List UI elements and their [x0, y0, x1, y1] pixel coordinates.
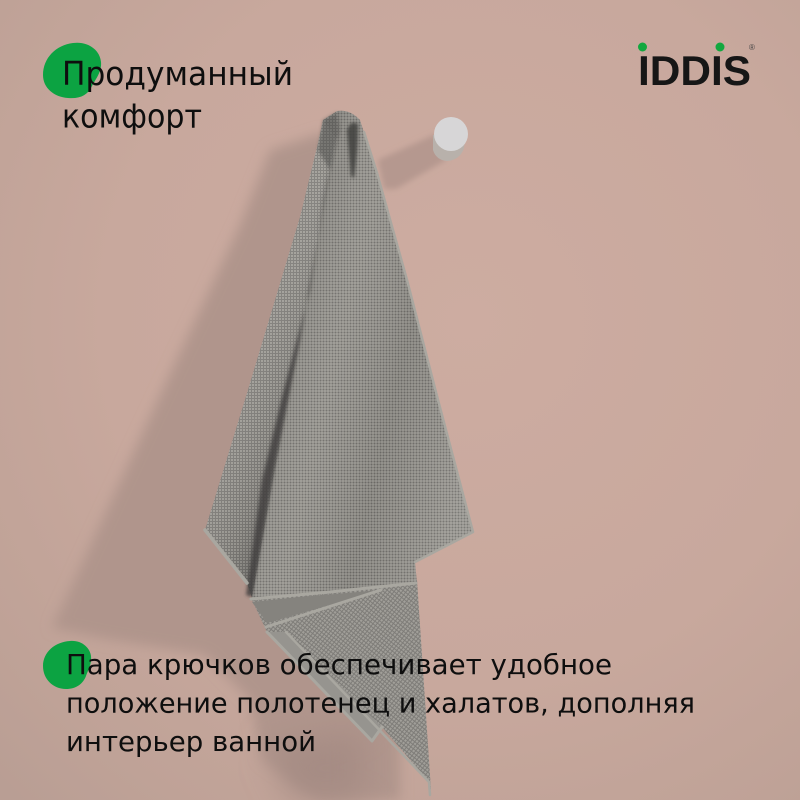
body text [66, 648, 695, 758]
title [62, 55, 293, 136]
logo: IDDIS: ® [749, 43, 755, 52]
towel top opening [347, 122, 358, 178]
towel shadow on wall [52, 132, 400, 800]
body text: интерьер ванной [66, 725, 316, 758]
towel hems [205, 132, 473, 795]
dark fold between panels [246, 150, 332, 597]
title: Продуманный [62, 55, 293, 93]
lower towel flap [252, 580, 431, 790]
title marker: green blob [43, 43, 101, 98]
wall hook [433, 117, 468, 161]
title: комфорт [62, 98, 202, 136]
front towel panel [252, 111, 473, 598]
towel top shade [318, 112, 340, 170]
body text: Пара крючков обеспечивает удобное [66, 648, 612, 681]
body text: положение полотенец и халатов, дополняя [66, 686, 695, 720]
body marker: green blob [43, 641, 91, 689]
towel [205, 111, 473, 795]
left towel panel [205, 111, 345, 598]
logo: IDDIS: IDDIS [638, 47, 751, 94]
hook shadow [378, 134, 446, 189]
